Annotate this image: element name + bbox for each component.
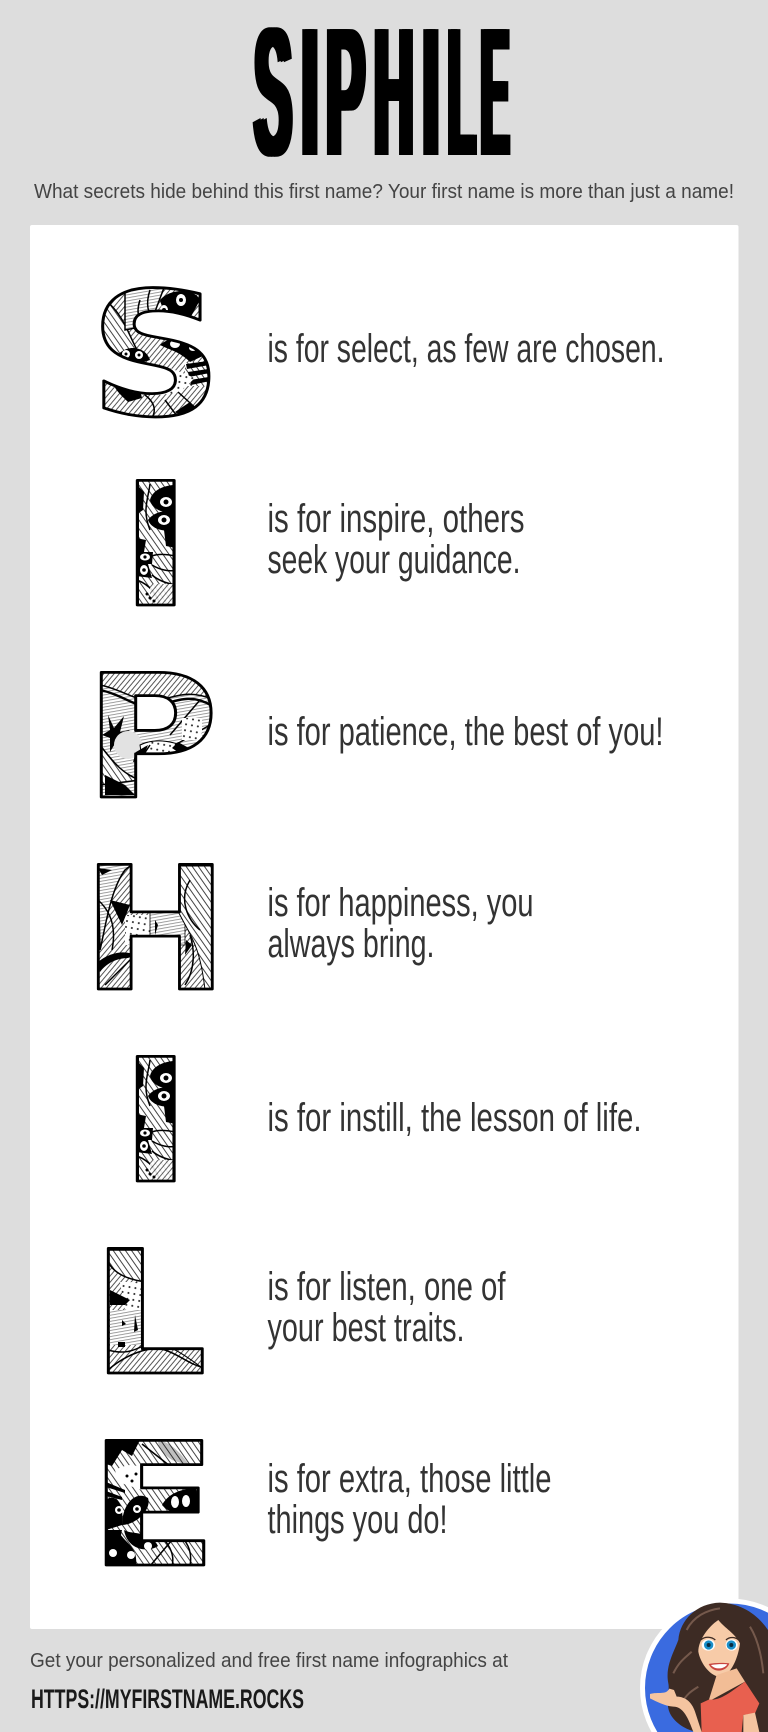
icon: mandala letter I <box>136 479 176 606</box>
icon: mandala letter E: E <box>89 1407 217 1606</box>
text: E lines: is for extra, those little <box>268 1457 552 1501</box>
text: I lines: seek your guidance. <box>268 538 520 582</box>
icon: mandala letter S: S <box>89 256 222 455</box>
text: L lines: is for listen, one of <box>268 1265 506 1309</box>
icon: mandala letter L: L <box>92 1214 207 1414</box>
text: L lines: your best traits. <box>268 1306 464 1350</box>
subtitle: What secrets hide behind this first name? Your first name is more than just a name! <box>34 181 734 203</box>
title <box>251 0 510 194</box>
icon: mandala letter L <box>106 1247 204 1374</box>
row: letter L <box>92 1214 506 1414</box>
icon: mandala letter E <box>104 1439 206 1566</box>
icon: mandala letter I: I <box>120 1023 192 1222</box>
text: H lines <box>268 881 534 966</box>
text: L lines <box>268 1265 506 1350</box>
text: H lines: is for happiness, you <box>268 881 534 925</box>
row: letter P <box>84 639 664 838</box>
row: letter E <box>89 1407 552 1606</box>
text: E lines: things you do! <box>268 1498 448 1542</box>
text: I lines: is for inspire, others <box>268 497 524 541</box>
footer url: HTTPS://MYFIRSTNAME.ROCKS <box>31 1684 304 1714</box>
row: letter H <box>82 831 534 1030</box>
row: letter I second <box>120 1023 642 1222</box>
avatar: woman in circle <box>642 1601 768 1732</box>
text: H lines: always bring. <box>268 922 434 966</box>
icon: mandala letter S <box>101 286 210 418</box>
icon: mandala letter H <box>96 863 214 990</box>
panel background <box>30 225 738 1629</box>
panel: name letters <box>30 225 738 1629</box>
row: letter I <box>120 447 524 646</box>
text: E lines <box>268 1457 552 1542</box>
text: second I line: is for instill, the lesson of life. <box>268 1096 642 1140</box>
icon: mandala letter P: P <box>84 639 219 838</box>
row: letter S <box>89 256 664 455</box>
icon: mandala letter P <box>100 671 213 798</box>
footer prompt: Get your personalized and free first name infographics at <box>30 1650 508 1672</box>
text: I lines <box>268 497 524 582</box>
icon: mandala letter I <box>136 1055 176 1182</box>
icon: mandala letter H: H <box>82 831 228 1030</box>
icon: mandala letter I: I <box>120 447 192 646</box>
